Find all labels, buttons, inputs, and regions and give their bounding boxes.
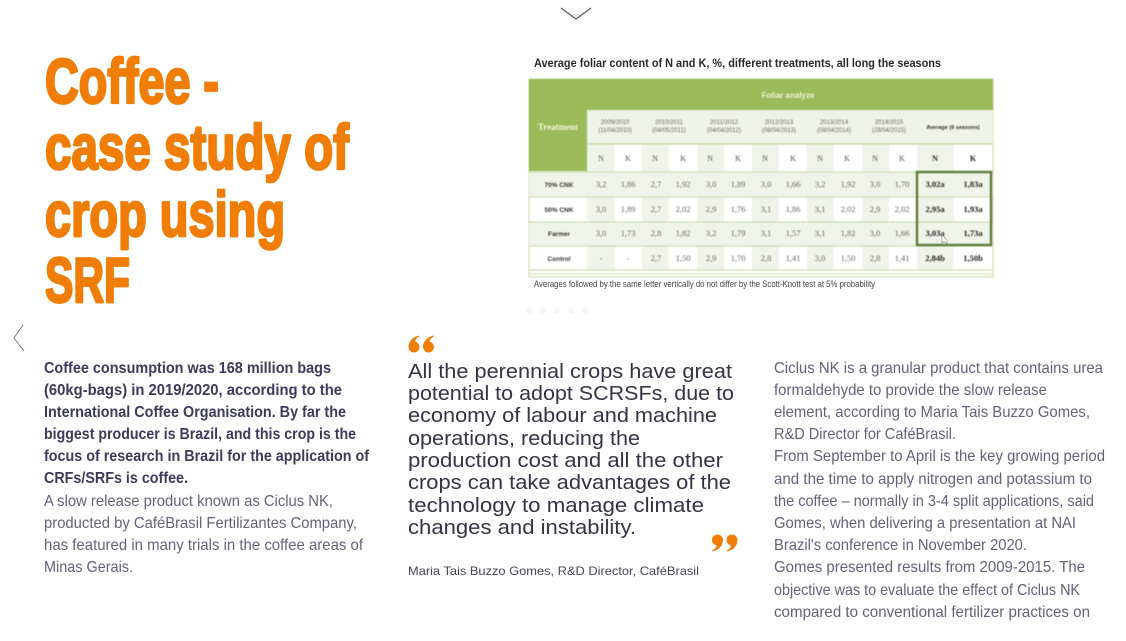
quote text xyxy=(408,361,734,539)
row: 70% CNK: 3,2 xyxy=(815,179,825,189)
row: 70% CNK: 3,0 xyxy=(870,179,880,189)
intro regular paragraph: Minas Gerais. xyxy=(44,559,133,576)
text block: right column: Brazil's conference in November 2020. xyxy=(774,537,1027,554)
row: Control: 2,8 xyxy=(870,253,880,263)
season header row: 2012/2013 xyxy=(765,120,794,126)
N/K labels: K xyxy=(735,154,741,163)
title: SRF xyxy=(45,246,130,316)
table: foliar analysis xyxy=(529,79,993,277)
season header row: (11/04/2010) xyxy=(598,128,632,134)
row: Farmer: 3,0 xyxy=(870,228,880,238)
row: 70% CNK: 1,89 xyxy=(731,179,745,189)
row: 50% CNK: 1,93a xyxy=(963,204,983,214)
row: Control: 1,41 xyxy=(895,253,909,263)
N/K labels: K xyxy=(790,154,796,163)
row: Farmer: 2,8 xyxy=(651,228,661,238)
season header row: (04/05/2011) xyxy=(652,128,686,134)
season header row: 2013/2014 xyxy=(820,120,849,126)
season header row xyxy=(587,110,993,144)
row: 70% CNK: 3,0 xyxy=(761,179,771,189)
season header row: (08/04/2014) xyxy=(817,128,851,134)
table header band xyxy=(529,79,993,171)
season header row: 2010/2011 xyxy=(655,120,684,126)
row: 50% CNK: 3,0 xyxy=(596,204,606,214)
quote text: production cost and all the other xyxy=(408,450,723,472)
season header row: 2011/2012 xyxy=(710,120,739,126)
row: Farmer: 3,1 xyxy=(815,228,825,238)
row: 50% CNK: 2,02 xyxy=(676,204,690,214)
row: Farmer: 1,73 xyxy=(621,228,635,238)
quote attribution: Maria Tais Buzzo Gomes, R&D Director, CaféBrasil xyxy=(408,564,699,578)
N/K labels: N xyxy=(652,154,658,163)
row: 50% CNK xyxy=(545,204,983,214)
quote text: technology to manage climate xyxy=(408,495,704,517)
row: 70% CNK: 1,83a xyxy=(963,179,983,189)
icon: closing quote mark xyxy=(712,534,738,552)
row: Farmer: 3,2 xyxy=(706,228,716,238)
row: 50% CNK: 2,7 xyxy=(651,204,661,214)
text block: right column: From September to April is the key growing period xyxy=(774,448,1105,465)
quote text: operations, reducing the xyxy=(408,428,640,450)
season header row: Average (6 seasons) xyxy=(926,125,980,131)
title: crop using xyxy=(45,180,285,250)
intro regular paragraph: A slow release product known as Ciclus NK, xyxy=(44,493,333,510)
row: Control: - xyxy=(600,253,603,263)
row: Control: 3,0 xyxy=(815,253,825,263)
row: Control: - xyxy=(627,253,630,263)
row: Control: Control xyxy=(547,256,571,263)
row: 50% CNK: 2,9 xyxy=(870,204,880,214)
column tints xyxy=(587,145,954,271)
text block: right column: and the time to apply nitrogen and potassium to xyxy=(774,471,1092,488)
row: Control: 1,50 xyxy=(841,253,855,263)
row: 70% CNK: 1,92 xyxy=(676,179,690,189)
title: Coffee - xyxy=(45,47,219,117)
row: 70% CNK: 1,70 xyxy=(895,179,909,189)
N/K labels xyxy=(598,154,977,163)
icon: down chevron xyxy=(561,8,591,19)
text block: right column xyxy=(774,360,1105,621)
title: case study of xyxy=(45,113,350,183)
N/K labels: K xyxy=(844,154,850,163)
shaded rows xyxy=(529,172,993,246)
row: Farmer: 1,57 xyxy=(786,228,800,238)
quote text: All the perennial crops have great xyxy=(408,361,732,383)
row: Farmer xyxy=(548,228,983,238)
row: 70% CNK xyxy=(545,179,983,189)
row: Control: 1,50b xyxy=(963,253,983,263)
season header row: (04/04/2012) xyxy=(707,128,741,134)
intro bold paragraph: International Coffee Organisation. By far the xyxy=(44,404,346,421)
season header row: 2014/2015 xyxy=(875,120,904,126)
row: Farmer: 1,79 xyxy=(731,228,745,238)
quote text: potential to adopt SCRSFs, due to xyxy=(408,383,734,405)
row: 50% CNK: 2,02 xyxy=(841,204,855,214)
row: Control: 1,70 xyxy=(731,253,745,263)
quote text: economy of labour and machine xyxy=(408,405,717,427)
text block: right column: the coffee – normally in 3-4 split applications, said xyxy=(774,493,1094,510)
row lines xyxy=(529,172,993,274)
text block: right column: compared to conventional fertilizer practices on xyxy=(774,604,1090,621)
intro regular paragraph xyxy=(44,493,364,576)
N/K labels: N xyxy=(817,154,823,163)
table header band: Treatment xyxy=(538,122,578,132)
table footnote: Averages followed by the same letter vertically do not differ by the Scott-Knott test at 5% probability xyxy=(534,279,875,289)
row: Farmer: 1,82 xyxy=(841,228,855,238)
row: Control: 2,7 xyxy=(651,253,661,263)
season header row: 2009/2010 xyxy=(601,120,630,126)
table header band: Foliar analyze xyxy=(762,91,815,100)
row: Control: 2,9 xyxy=(706,253,716,263)
table heading: Average foliar content of N and K, %, different treatments, all long the seasons xyxy=(534,56,941,70)
row: 50% CNK: 3,1 xyxy=(815,204,825,214)
N/K labels: K xyxy=(625,154,631,163)
row: 50% CNK: 1,89 xyxy=(621,204,635,214)
pagination dots xyxy=(526,308,588,314)
N/K labels: N xyxy=(707,154,713,163)
row: 70% CNK: 3,02a xyxy=(925,179,945,189)
row: 70% CNK: 1,92 xyxy=(841,179,855,189)
N/K labels: K xyxy=(970,154,977,163)
N/K labels: K xyxy=(899,154,905,163)
row: Farmer: 1,73a xyxy=(963,228,983,238)
text block: right column: Gomes presented results from 2009-2015. The xyxy=(774,559,1085,576)
text block: right column: Ciclus NK is a granular product that contains urea xyxy=(774,360,1103,377)
intro bold paragraph: Coffee consumption was 168 million bags xyxy=(44,360,331,377)
quote text: crops can take advantages of the xyxy=(408,472,731,494)
row: Control: 2,84b xyxy=(925,253,945,263)
row: Control xyxy=(547,253,983,263)
row: Control: 1,41 xyxy=(786,253,800,263)
intro bold paragraph: biggest producer is Brazil, and this crop is the xyxy=(44,426,356,443)
row: 70% CNK: 1,66 xyxy=(786,179,800,189)
row: Farmer: 3,0 xyxy=(596,228,606,238)
text block: intro left xyxy=(44,360,370,576)
row: 70% CNK: 3,0 xyxy=(706,179,716,189)
row: 70% CNK: 3,2 xyxy=(596,179,606,189)
season header row: (08/04/2013) xyxy=(762,128,796,134)
icon: opening quote mark xyxy=(408,336,434,353)
N/K labels: N xyxy=(598,154,604,163)
text block: right column: element, according to Maria Tais Buzzo Gomes, xyxy=(774,404,1090,421)
N/K labels: K xyxy=(680,154,686,163)
row: Control: 2,8 xyxy=(761,253,771,263)
row: 70% CNK: 2,7 xyxy=(651,179,661,189)
intro bold paragraph: focus of research in Brazil for the application of xyxy=(44,448,370,465)
intro bold paragraph: CRFs/SRFs is coffee. xyxy=(44,470,188,487)
intro regular paragraph: producted by CaféBrasil Fertilizantes Company, xyxy=(44,515,357,532)
text block: right column: R&D Director for CaféBrasil. xyxy=(774,426,956,443)
row: Farmer: 3,1 xyxy=(761,228,771,238)
quote text: changes and instability. xyxy=(408,517,636,539)
intro bold paragraph: (60kg-bags) in 2019/2020, according to the xyxy=(44,382,342,399)
row: 50% CNK: 2,95a xyxy=(925,204,945,214)
row: Farmer: 1,66 xyxy=(895,228,909,238)
intro regular paragraph: has featured in many trials in the coffee areas of xyxy=(44,537,364,554)
row: Farmer: 1,82 xyxy=(676,228,690,238)
row: Control: 1,50 xyxy=(676,253,690,263)
text block: right column: Gomes, when delivering a presentation at NAI xyxy=(774,515,1076,532)
row: 50% CNK: 2,9 xyxy=(706,204,716,214)
N/K labels: N xyxy=(872,154,878,163)
row: 50% CNK: 1,86 xyxy=(786,204,800,214)
intro bold paragraph xyxy=(44,360,370,487)
row: 50% CNK: 1,76 xyxy=(731,204,745,214)
text block: right column: formaldehyde to provide the slow release xyxy=(774,382,1047,399)
row: Farmer: Farmer xyxy=(548,231,570,238)
row: 50% CNK: 50% CNK xyxy=(545,207,574,214)
row: 50% CNK: 3,1 xyxy=(761,204,771,214)
text block: right column: objective was to evaluate the effect of Ciclus NK xyxy=(774,582,1080,599)
icon: mouse cursor xyxy=(942,235,947,244)
row: Farmer: 3,03a xyxy=(925,228,945,238)
row: 70% CNK: 1,86 xyxy=(621,179,635,189)
title xyxy=(45,47,350,316)
icon: left chevron xyxy=(14,325,24,351)
N/K labels: N xyxy=(932,154,938,163)
row: 50% CNK: 2,02 xyxy=(895,204,909,214)
season header row: (28/04/2015) xyxy=(872,128,906,134)
row: 70% CNK: 70% CNK xyxy=(545,182,574,189)
N/K labels: N xyxy=(762,154,768,163)
highlight box xyxy=(917,172,991,245)
